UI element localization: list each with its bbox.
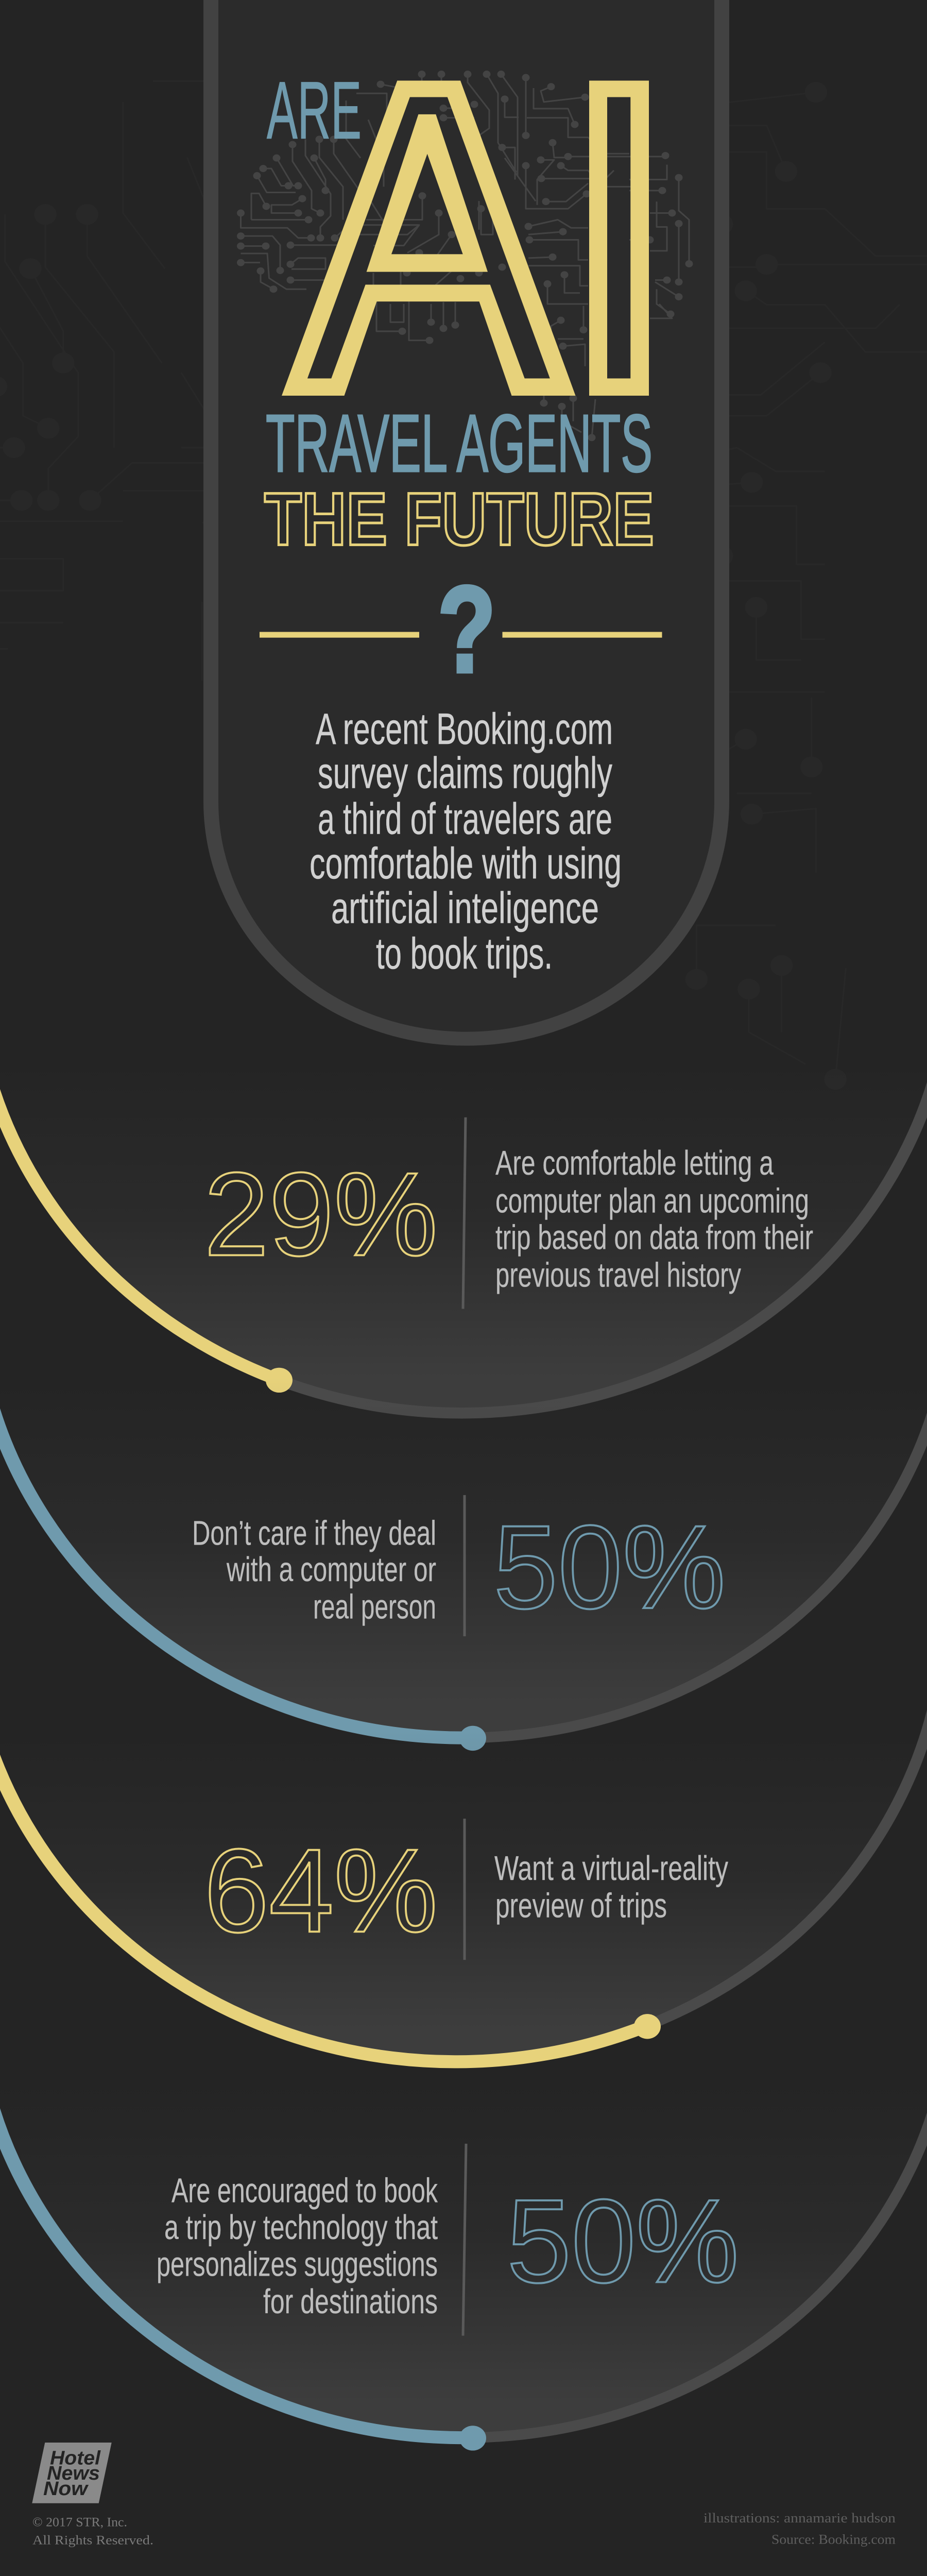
description: personalized suggestions: personalizes suggestions: [157, 2245, 438, 2283]
panel: stat 29%: [0, 1046, 927, 1413]
description: 29%: Are comfortable letting a: [495, 1144, 774, 1182]
description: 29%: [495, 1144, 813, 1294]
intro text block: to book trips.: [376, 929, 553, 978]
title word: are: ARE: [267, 64, 362, 156]
description: virtual reality: Want a virtual-reality: [494, 1849, 728, 1887]
description: computer or real person: real person: [313, 1587, 436, 1626]
number: 64%: 64%: [204, 1824, 438, 1957]
description: personalized suggestions: [157, 2171, 438, 2320]
logo: Hotel News Now: News: [47, 2463, 100, 2484]
description: personalized suggestions: Are encouraged to book: [171, 2171, 438, 2210]
panel: stat 50% personalized suggestions: [0, 2078, 927, 2451]
left rule: [260, 632, 419, 638]
panel: headline capsule: [211, 0, 722, 1039]
title letters: AI outlined: [282, 80, 649, 396]
title line: the future: THE FUTURE: [264, 478, 654, 561]
intro text block: [310, 704, 622, 978]
number: 50%: 50%: [507, 2175, 739, 2308]
description: virtual reality: preview of trips: [495, 1886, 667, 1925]
intro text block: artificial inteligence: [331, 883, 599, 933]
logo: Hotel News Now: Now: [43, 2478, 89, 2500]
right rule: [503, 632, 662, 638]
description: computer or real person: Don’t care if they deal: [192, 1514, 436, 1552]
intro text block: A recent Booking.com: [316, 704, 613, 753]
intro text block: comfortable with using: [310, 839, 622, 888]
copyright: [32, 2515, 153, 2547]
panel: stat 50% computer or person: [0, 1378, 927, 1751]
number: 50%: 50%: [493, 1500, 726, 1633]
copyright: All Rights Reserved.: [32, 2533, 153, 2547]
question mark: ?: [438, 561, 496, 698]
description: virtual reality: [494, 1849, 728, 1925]
credits: Source: Booking.com: [771, 2532, 896, 2547]
logo: Hotel News Now: Hotel: [50, 2447, 101, 2469]
logo: Hotel News Now: [32, 2443, 112, 2503]
description: computer or real person: [192, 1514, 436, 1626]
credits: illustrations: annamarie hudson: [703, 2511, 896, 2526]
copyright: © 2017 STR, Inc.: [32, 2515, 127, 2529]
faint circuit background texture: [0, 26, 927, 1079]
description: computer or real person: with a computer or: [226, 1550, 436, 1589]
description: personalized suggestions: for destinations: [263, 2282, 438, 2320]
number: 29%: 29%: [204, 1147, 438, 1280]
description: 29%: previous travel history: [495, 1256, 741, 1294]
description: personalized suggestions: a trip by technology that: [164, 2208, 438, 2246]
intro text block: survey claims roughly: [318, 748, 612, 798]
credits: [703, 2511, 896, 2547]
panel: stat 64%: [0, 1658, 927, 2062]
icon: circuit brain illustration: [240, 74, 689, 437]
intro text block: a third of travelers are: [318, 794, 612, 843]
